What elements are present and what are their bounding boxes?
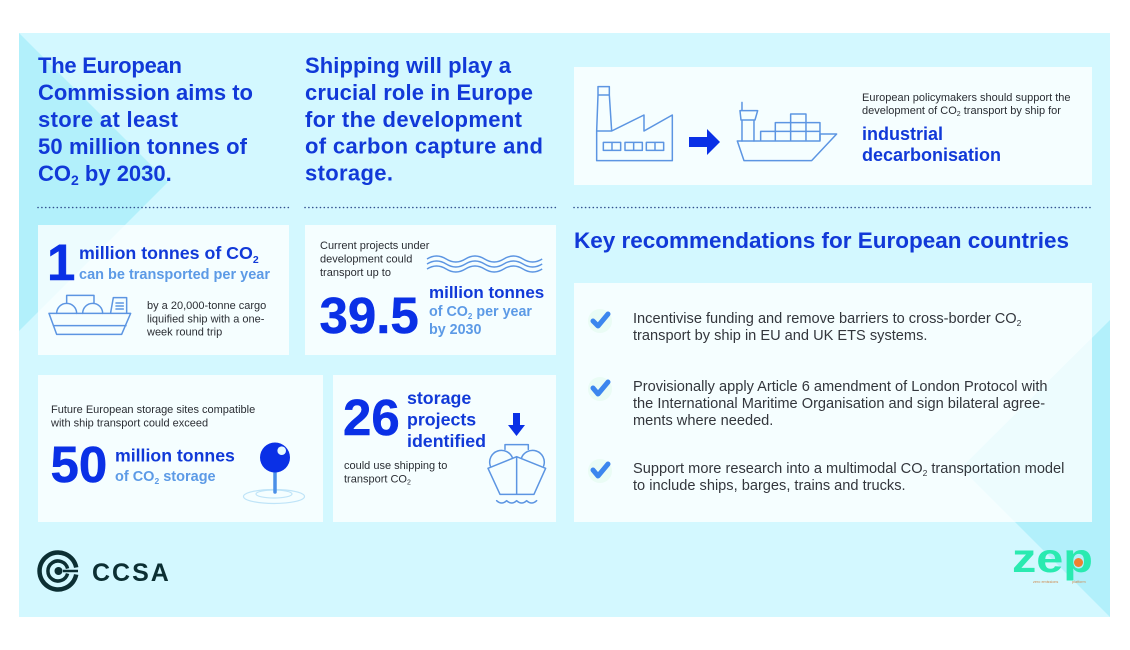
big number 39.5: 39.5 (320, 287, 419, 344)
panel: industrial decarbonisation (574, 67, 1092, 185)
heading: role of shipping: crucial role in Europe (305, 80, 533, 105)
stat label: million tonnes (115, 446, 235, 466)
recommendation 1: transport by ship in EU and UK ETS systems. (633, 328, 927, 344)
stat label: 2 (468, 312, 473, 321)
big number 50: 50 (50, 436, 107, 493)
stat label: identified (407, 431, 486, 451)
text: ship description: week round trip (146, 326, 222, 338)
recommendation 2 (588, 377, 1048, 429)
text: shipping note: 2 (407, 480, 411, 486)
stat label: of CO (115, 469, 154, 485)
recommendation 2: Provisionally apply Article 6 amendment of London Protocol with (633, 379, 1048, 395)
heading: European Commission aim: by 2030. (79, 161, 172, 186)
text: policy statement: development of CO (862, 105, 957, 117)
big number 1: 1 (47, 234, 75, 291)
text: policy statement: decarbonisation (862, 145, 1001, 165)
text: shipping note: transport CO (344, 474, 407, 486)
logo: CCSA: CCSA (92, 559, 171, 587)
stat label: by 2030 (429, 322, 482, 338)
icon: arrow (689, 129, 720, 155)
recommendation 3: to include ships, barges, trains and trucks. (633, 478, 906, 494)
icon: ship front (488, 445, 546, 503)
stat label: storage (159, 469, 216, 485)
logo: ZEP: zep (1012, 535, 1093, 581)
heading: European Commission aim: Commission aims to (38, 80, 253, 105)
stat label: 2 (253, 254, 259, 266)
heading: role of shipping: storage. (305, 160, 393, 186)
text: policy statement: industrial (862, 124, 943, 144)
icon: cargo ship (49, 295, 131, 334)
text: intro (50, 404, 255, 430)
panel: 1 million tonnes (38, 225, 289, 355)
text: ship description: by a 20,000-tonne cargo (147, 300, 266, 312)
heading: European Commission aim: 2 (71, 172, 79, 188)
recommendation 1 (588, 309, 1022, 344)
stat label (79, 243, 270, 283)
logo: ZEP: zero emissions (1033, 580, 1058, 584)
heading: role of shipping: of carbon capture and (305, 134, 543, 158)
icon: factory (597, 87, 672, 161)
recommendation 3: transportation model (927, 461, 1064, 477)
icon: map pin (244, 442, 304, 504)
text: shipping note: could use shipping to (344, 460, 447, 472)
recommendation 1: Incentivise funding and remove barriers to cross-border CO (633, 311, 1017, 327)
icon: waves (427, 256, 542, 272)
stat label: million tonnes (429, 283, 544, 302)
text: policy statement (862, 92, 1071, 165)
dotted dividers (38, 206, 1092, 208)
panel: 50 million tonnes storage (38, 375, 323, 522)
text: policy statement: transport by ship for (961, 105, 1061, 117)
stat label: per year (472, 304, 532, 320)
stat label (407, 388, 486, 451)
stat label (429, 283, 544, 338)
heading: European Commission aim: CO (38, 161, 71, 186)
text: intro: Current projects under (320, 240, 430, 252)
heading: role of shipping: Shipping will play a (305, 53, 512, 78)
heading: role of shipping: for the development (305, 107, 523, 132)
text: ship description: liquified ship with a one- (147, 314, 265, 326)
heading: role of shipping (305, 53, 543, 186)
recommendation 3: Support more research into a multimodal CO (633, 461, 923, 477)
logo: CCSA (40, 552, 171, 589)
stat label (115, 446, 235, 486)
recommendation 1: 2 (1017, 318, 1022, 328)
icon: container ship (737, 102, 837, 161)
stat label: million tonnes of CO (79, 243, 253, 263)
panel: recommendations (574, 283, 1092, 522)
icon: down arrow (508, 413, 525, 436)
stat label: of CO (429, 304, 468, 320)
stat label: 2 (154, 476, 159, 486)
text: shipping note (344, 460, 447, 486)
recommendation 3: 2 (923, 468, 928, 478)
text: intro: transport up to (320, 267, 391, 279)
logo: ZEP: platform (1072, 580, 1086, 584)
heading: European Commission aim: 50 million tonnes of (38, 134, 248, 159)
heading: European Commission aim (38, 53, 253, 188)
recommendation 2: ments where needed. (633, 413, 773, 429)
text: intro (320, 240, 430, 279)
big number 26: 26 (343, 389, 400, 446)
recommendation 2: the International Maritime Organisation and sign bilateral agree- (633, 396, 1045, 412)
text: policy statement: 2 (957, 111, 961, 118)
text: intro: development could (320, 254, 412, 266)
heading: European Commission aim: store at least (38, 107, 179, 132)
stat label: projects (407, 410, 476, 430)
text: intro: with ship transport could exceed (50, 418, 208, 430)
stat label: can be transported per year (79, 267, 270, 283)
text: intro: Future European storage sites compatible (51, 404, 255, 416)
heading: key recommendations: Key recommendations for European countries (574, 228, 1069, 253)
panel: 26 storage projects (333, 375, 556, 522)
heading: European Commission aim: The European (38, 53, 182, 78)
text: policy statement: European policymakers should support the (862, 92, 1071, 104)
recommendation 3 (588, 459, 1064, 494)
text: ship description (146, 300, 266, 338)
stat label: storage (407, 388, 471, 408)
panel: 39.5 million tonnes (305, 225, 556, 355)
